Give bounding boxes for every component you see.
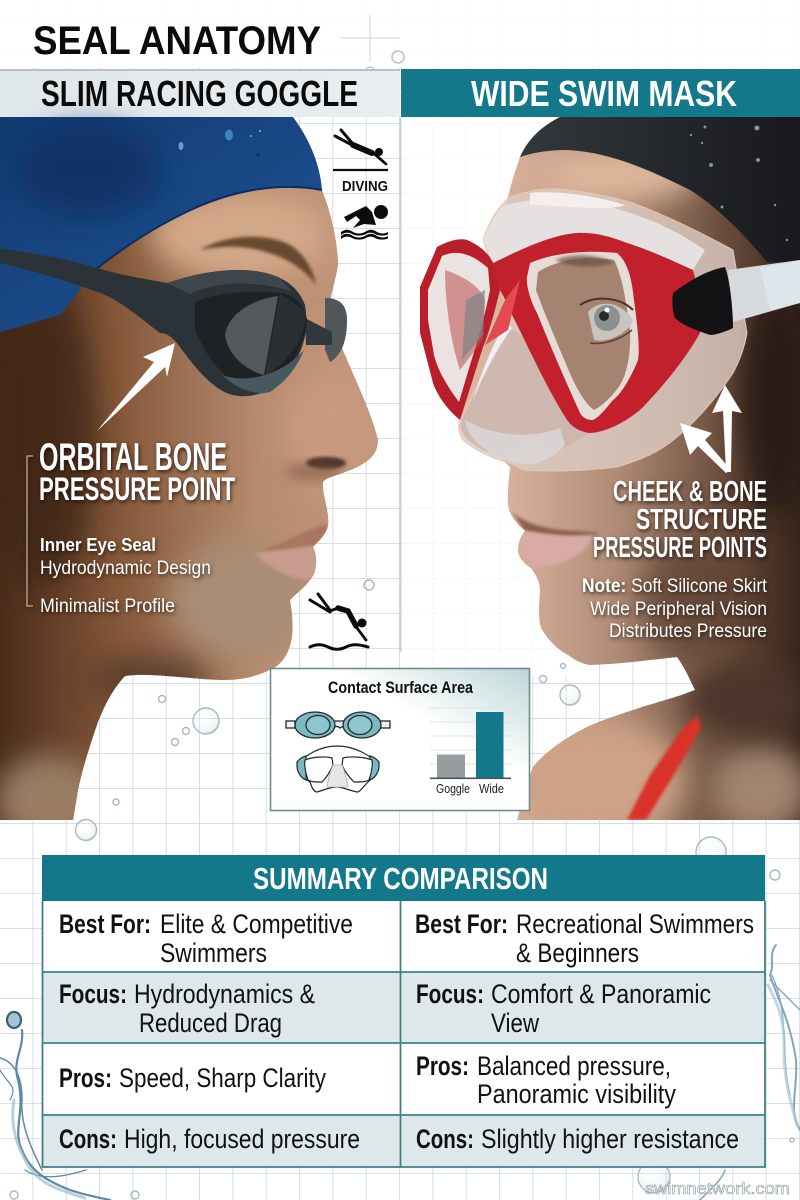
bar chart: Wide [479, 781, 504, 796]
heading: wide swim mask: WIDE SWIM MASK [471, 73, 737, 114]
heading: slim racing goggle [0, 69, 400, 117]
divider between panels [400, 117, 402, 652]
table: summary comparison [42, 855, 765, 1167]
row: cons [59, 1124, 739, 1154]
label: diving: DIVING [342, 178, 388, 195]
icon: wide mask [297, 746, 379, 792]
callout: orbital bone pressure point: Hydrodynamic Design [40, 557, 211, 579]
row: cons: Cons: [416, 1124, 474, 1154]
water droplets [10, 580, 794, 1199]
row: best for: Elite & Competitive [160, 909, 353, 939]
goggle: far lens and bridge [305, 298, 347, 362]
bar chart [430, 708, 512, 796]
row: focus: Comfort & Panoramic [491, 979, 711, 1009]
row: best for: & Beginners [516, 938, 639, 968]
mask: strap [728, 260, 800, 322]
title [33, 15, 404, 75]
callout: orbital bone pressure point: PRESSURE POINT [39, 471, 235, 507]
chart card: contact surface area [270, 668, 530, 810]
swim cap: blue [0, 117, 322, 332]
swim cap: black [520, 117, 800, 262]
row: pros: Balanced pressure, [477, 1051, 671, 1081]
callout: cheek and bone structure: Note: Soft Silicone Skirt [582, 576, 768, 597]
mask: right lens with eye [527, 252, 639, 420]
heading: wide swim mask [401, 69, 800, 117]
title: SEAL ANATOMY [33, 19, 321, 63]
row: pros: Speed, Sharp Clarity [119, 1063, 326, 1093]
row: best for: Best For: [415, 909, 508, 939]
face: left profile [0, 117, 400, 845]
arrow: orbital bone [97, 343, 175, 431]
goggle: strap and frame [0, 248, 306, 396]
row: cons: Cons: [59, 1124, 117, 1154]
panel: wide swim mask portrait [420, 117, 800, 840]
watermark: swimnetwork.com [645, 1179, 790, 1198]
mask: left lens [420, 239, 500, 420]
callout: cheek and bone structure: Distributes Pressure [609, 621, 767, 642]
row: best for: Swimmers [160, 938, 267, 968]
mask: black buckle [672, 267, 733, 335]
table heading: SUMMARY COMPARISON [253, 861, 548, 896]
goggle: lens [195, 292, 307, 393]
callout: cheek and bone structure: Wide Peripheral Vision [590, 599, 767, 620]
icon: swimmer [341, 205, 388, 240]
card title: Contact Surface Area [328, 679, 474, 697]
icon: slim goggle [286, 712, 390, 738]
callout: orbital bone pressure point: Minimalist Profile [40, 595, 175, 617]
row: best for: Recreational Swimmers [516, 909, 754, 939]
callout: orbital bone pressure point: Inner Eye Seal [40, 534, 156, 555]
row: focus: Focus: [416, 979, 484, 1009]
row: focus [59, 979, 711, 1038]
face: right profile [440, 117, 800, 840]
mask: soft silicone skirt [459, 189, 747, 471]
mask: right lens frame [493, 233, 701, 433]
row: pros: Panoramic visibility [477, 1079, 676, 1109]
callout: orbital bone pressure point: ORBITAL BONE [39, 436, 227, 479]
arrows: cheek and bone [680, 385, 742, 473]
row: cons: Slightly higher resistance [481, 1124, 739, 1154]
row: pros: Pros: [59, 1063, 112, 1093]
row: focus: Reduced Drag [139, 1008, 282, 1038]
icon: diver with line [333, 130, 388, 170]
row: focus: Focus: [59, 979, 127, 1009]
row: pros [59, 1051, 676, 1109]
row: focus: Hydrodynamics & [134, 979, 315, 1009]
heading: slim racing goggle: SLIM RACING GOGGLE [41, 73, 358, 114]
callout: cheek and bone structure [582, 476, 768, 642]
water splash: left [0, 1012, 110, 1200]
icon: diver into water [310, 594, 368, 649]
row: pros: Pros: [416, 1051, 469, 1081]
callout: orbital bone pressure point [27, 436, 235, 617]
row: best for: Best For: [59, 909, 151, 939]
panel: slim racing goggle portrait [0, 117, 400, 845]
bar chart: Goggle [436, 781, 470, 796]
water splash: right [700, 945, 800, 1200]
row: best for [59, 909, 754, 968]
row: focus: View [491, 1008, 539, 1038]
row: cons: High, focused pressure [124, 1124, 360, 1154]
